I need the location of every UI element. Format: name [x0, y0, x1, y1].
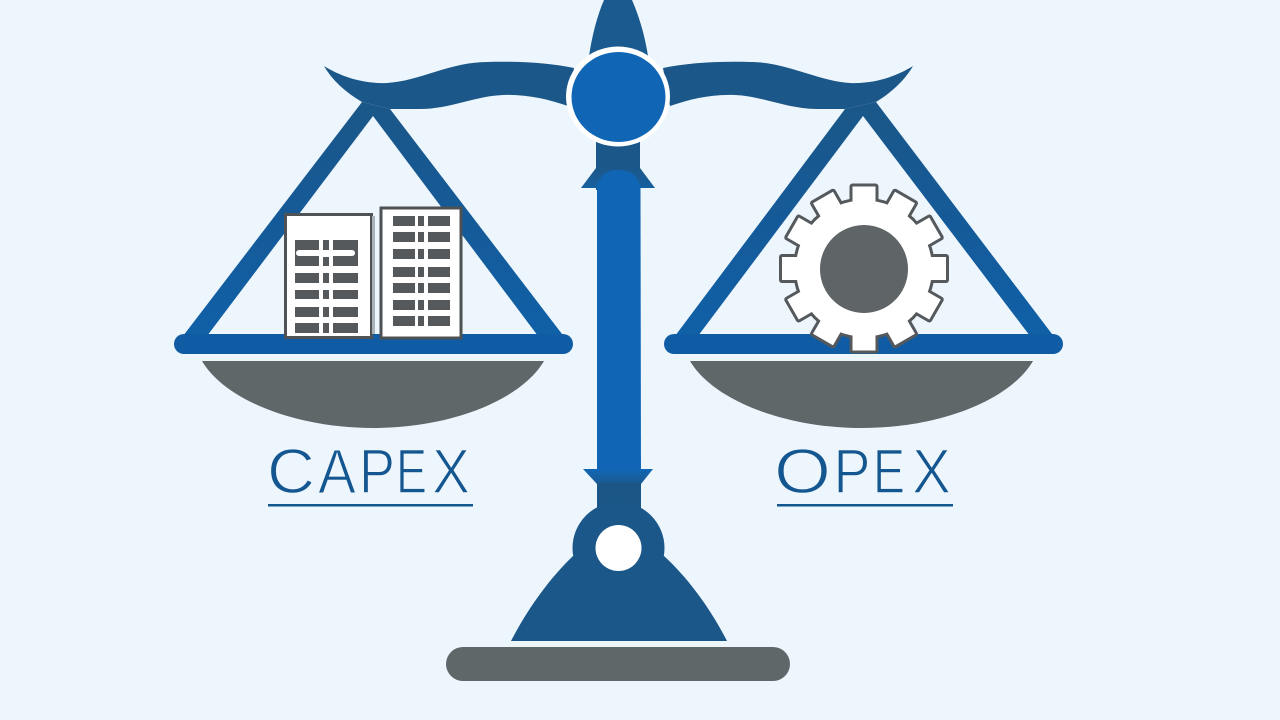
column upper arrowhead	[581, 168, 655, 188]
CAPEX label	[267, 437, 470, 507]
left balance bar	[174, 334, 573, 354]
base knob	[572, 502, 664, 594]
column shaft	[597, 170, 641, 480]
pivot blue disc	[572, 52, 666, 142]
left pan hanger triangle	[183, 102, 562, 336]
beam pivot circle	[566, 46, 670, 146]
pivot white ring	[566, 46, 670, 146]
right pan	[690, 361, 1033, 428]
right beam arm	[663, 62, 913, 109]
base plate	[446, 647, 790, 681]
base knob hole	[596, 525, 642, 571]
OPEX label	[774, 437, 951, 507]
icon: buildings	[286, 208, 461, 338]
column lower arrowhead	[583, 469, 653, 484]
base pedestal	[511, 556, 727, 641]
left beam arm	[324, 62, 574, 109]
CAPEX label: A	[318, 437, 356, 507]
column lower neck	[597, 483, 641, 513]
building divider	[372, 216, 375, 334]
spire on top of the scale	[589, 0, 648, 56]
CAPEX label: C	[267, 437, 315, 507]
right balance bar	[664, 334, 1063, 354]
OPEX label: P	[834, 437, 870, 507]
OPEX label: X	[912, 437, 951, 507]
gear white body	[782, 186, 946, 350]
icon: gear	[782, 186, 946, 350]
OPEX label: O	[774, 437, 831, 507]
right pan hanger triangle	[675, 102, 1052, 336]
column upper neck	[596, 140, 640, 190]
CAPEX underline	[268, 504, 473, 506]
CAPEX label: P	[359, 437, 395, 507]
building left	[286, 214, 372, 338]
central column	[581, 140, 655, 513]
gear hub	[820, 225, 908, 313]
CAPEX label: E	[396, 437, 427, 507]
CAPEX label: X	[432, 437, 470, 507]
building right	[381, 208, 461, 338]
left pan	[202, 361, 544, 428]
gear outline	[782, 186, 946, 350]
OPEX label: E	[873, 437, 905, 507]
OPEX underline	[777, 504, 953, 506]
